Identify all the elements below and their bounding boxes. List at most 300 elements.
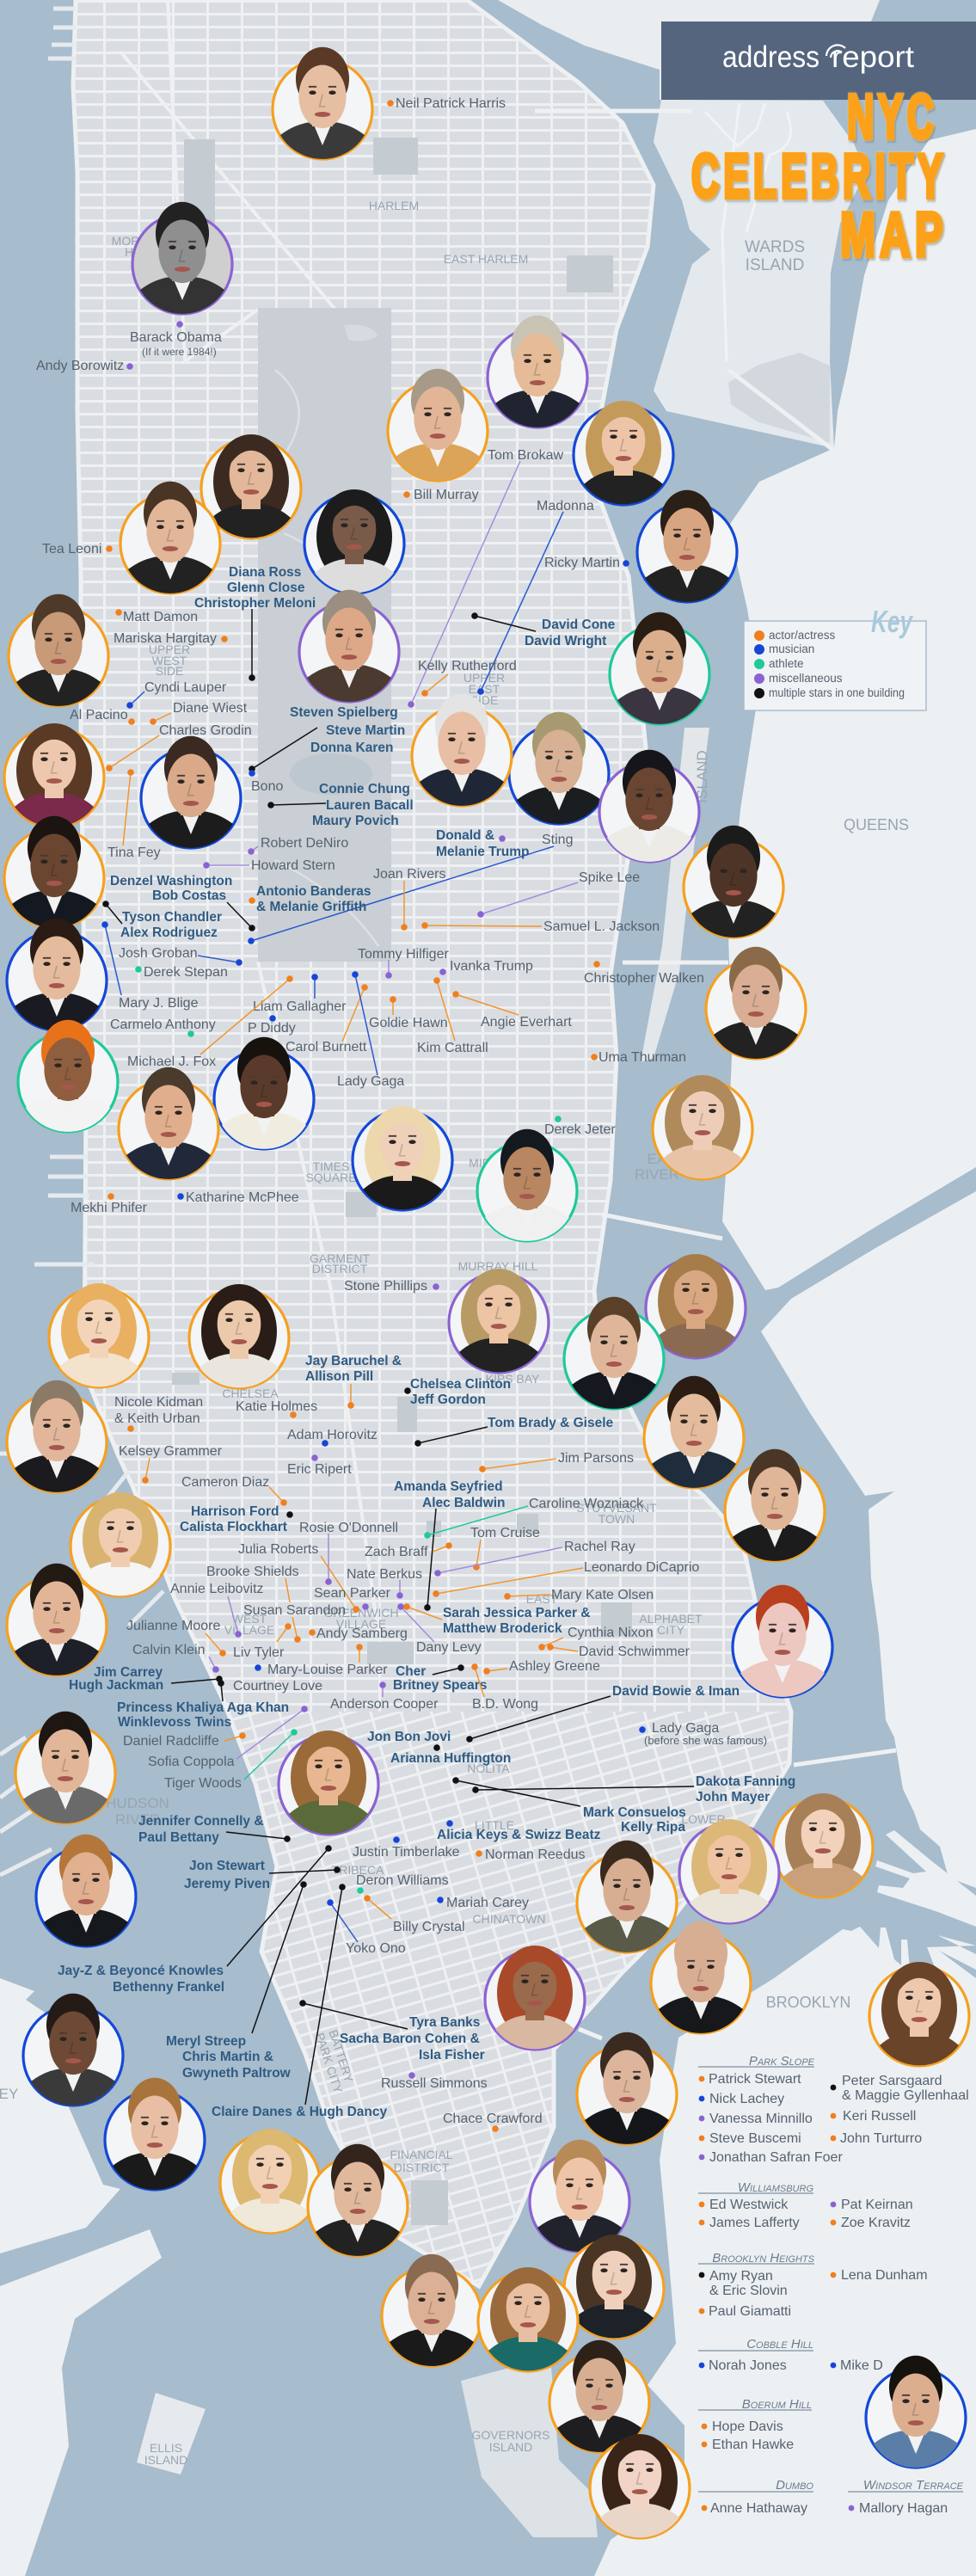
label: Cynthia Nixon [538,1626,654,1651]
label: Jennifer Connelly and Paul Bettany: Jennifer Connelly & [138,1814,264,1829]
Brooklyn panel: Park Slope: Patrick Stewart [709,2072,801,2087]
Brooklyn panel: Williamsburg: Pat Keirnan [841,2198,913,2212]
label: Tom Brady and Gisele [414,1416,614,1447]
neighbourhood labels: RIVER [115,1811,160,1828]
neighbourhood labels: LOWER [681,1812,726,1826]
neighbourhood labels: NOLITA [467,1761,510,1775]
neighbourhood labels: WEST [232,1612,267,1626]
portrait: Mariska Hargitay [201,434,301,538]
label: Charles Grodin: Charles Grodin [159,723,252,738]
label: David Cone, David Wright: David Cone [542,618,616,632]
label: Connie Chung, Lauren Bacall, Maury Povich: Maury Povich [312,814,399,828]
label: Arianna Huffington: Arianna Huffington [390,1751,511,1766]
map: Randalls Island park [728,353,830,443]
label: Jay-Z and Beyonce, Bethenny Frankel: Jay-Z & Beyoncé Knowles [58,1964,224,1978]
label: Samuel L. Jackson: Samuel L. Jackson [543,919,660,934]
label: Tom Cruise: Tom Cruise [470,1526,540,1540]
label: Julia Roberts [238,1542,359,1613]
neighbourhood labels: LITTLE [475,1818,514,1832]
label: Princess Khaliya Aga Khan, Winklevoss Twins [117,1700,289,1730]
label: Justin Timberlake: Justin Timberlake [353,1845,460,1860]
label: Ivanka Trump: Ivanka Trump [450,959,533,974]
label: Kelly Rutherford: Kelly Rutherford [418,659,517,673]
label: Jim Parsons: Jim Parsons [558,1451,634,1466]
Brooklyn panel: Windsor Terrace: Mallory Hagan [859,2501,948,2516]
portrait: Al Pacino [9,594,108,706]
label: Deron Williams: Deron Williams [356,1873,449,1888]
neighbourhood labels: EAST HARLEM [444,252,528,266]
neighbourhood labels: STUYVESANT [576,1501,657,1515]
neighbourhood labels: HUDSON [106,1795,169,1811]
portrait: Jonathan Safran Foer [530,2140,629,2252]
label: Donald and Melanie Trump: Melanie Trump [436,845,530,859]
map: Ellis Island [137,2393,206,2475]
neighbourhood labels: EA [648,1151,667,1167]
label: Jay Baruchel and Allison Pill: Allison Pill [305,1369,373,1384]
neighbourhood labels: CITY [657,1623,685,1637]
label: Billy Crystal: Billy Crystal [393,1920,465,1934]
map: Wards and Randalls Island [654,100,866,448]
label: Dakota Fanning, John Mayer: Dakota Fanning [696,1774,795,1789]
label: Susan Sarandon: Susan Sarandon [243,1603,346,1618]
Brooklyn panel: Brooklyn Heights: Amy Ryan [709,2269,773,2284]
label: Jim Carrey, Hugh Jackman: Jim Carrey [94,1665,163,1680]
Brooklyn panel: Dumbo: Dumbo [776,2478,813,2493]
label: Katie Holmes: Katie Holmes [236,1399,317,1414]
label: Barack Obama: (If it were 1984!) [142,346,217,358]
portrait: Chelsea Clinton [449,1269,549,1373]
map: Queens [722,129,976,1290]
label: Rosie O'Donnell: Rosie O'Donnell [299,1521,398,1535]
Brooklyn panel: Park Slope: Nick Lachey [709,2092,784,2106]
key panel: actor/actress [769,629,836,642]
portrait: Sting [509,712,609,824]
Brooklyn panel: Windsor Terrace [848,2478,964,2516]
map: Brooklyn south [594,1927,976,2576]
label: Barack Obama: Barack Obama [130,330,222,345]
label: Dakota Fanning, John Mayer: John Mayer [696,1790,770,1804]
portrait: Jon Bon Jovi [36,1835,136,1946]
label: Diane Wiest [150,701,248,725]
portrait: Derek Jeter [477,1129,577,1241]
Brooklyn panel: Windsor Terrace: Windsor Terrace [863,2478,964,2493]
label: Nicole Kidman and Keith Urban: Nicole Kidman [114,1395,203,1410]
label: Kelsey Grammer: Kelsey Grammer [119,1444,223,1459]
label: Dany Levy: Dany Levy [416,1640,482,1655]
neighbourhood labels: TIMES [313,1159,349,1173]
label: Calvin Klein: Calvin Klein [132,1643,205,1657]
label: Joan Rivers [373,867,445,931]
label: Donald and Melanie Trump [436,828,530,859]
label: Chelsea Clinton, Jeff Gordon: Chelsea Clinton [410,1377,511,1392]
label: Chelsea Clinton, Jeff Gordon [404,1377,511,1407]
label: Spike Lee [477,870,640,918]
portrait: Kelly Ripa [679,1819,779,1923]
label: Donald and Melanie Trump: Donald & [436,828,494,843]
label: Tyson Chandler, Alex Rodriguez: Tyson Chandler [122,910,222,925]
portrait: David Bowie [733,1585,832,1697]
neighbourhood labels: MOR [112,234,139,248]
label: Tom Cruise [470,1526,540,1571]
label: Liv Tyler: Liv Tyler [233,1645,285,1660]
Brooklyn panel: Williamsburg [698,2180,913,2230]
neighbourhood labels: ISLAND [144,2453,187,2467]
neighbourhood labels: TOWN [598,1512,635,1526]
neighbourhood labels: GARMENT [310,1251,370,1265]
label: Carol Burnett [285,984,368,1054]
neighbourhood labels: UPPER [149,642,190,656]
key panel: musician [769,642,814,655]
portrait: Arianna Huffington [279,1731,378,1835]
Brooklyn panel: Dumbo: Anne Hathaway [710,2501,807,2516]
label: Tiger Woods: Tiger Woods [164,1776,242,1791]
label: Tyra Banks, Sacha Baron Cohen and Isla Fisher: Sacha Baron Cohen & [340,2032,480,2046]
label: Dany Levy [397,1603,482,1655]
neighbourhood labels: VILLAGE [336,1617,386,1631]
portrait: Jay-Z [23,1994,123,2106]
label: Mary-Louise Parker: Mary-Louise Parker [267,1663,388,1677]
label: Alicia Keys and Swizz Beatz: Alicia Keys & Swizz Beatz [437,1828,601,1842]
neighbourhood labels: GOVERNORS [471,2428,550,2442]
label: Antonio Banderas and Melanie Griffith: Antonio Banderas [256,884,371,899]
portrait: Michael J. Fox [119,1067,218,1179]
label: B.D. Wong [471,1663,538,1712]
neighbourhood labels: TRIBECA [332,1863,384,1877]
portrait: Dakota Fanning [773,1793,873,1897]
label: Cyndi Lauper: Cyndi Lauper [144,680,227,695]
Brooklyn panel: Cobble Hill: Cobble Hill [746,2337,813,2352]
neighbourhood labels: SIDE [156,664,183,678]
label: Tommy Hilfiger: Tommy Hilfiger [358,947,449,962]
Brooklyn panel: Park Slope: Park Slope [749,2054,815,2069]
label: Bono: Bono [251,779,283,794]
portrait: Denzel Washington [4,816,104,928]
label: Derek Stepan: Derek Stepan [144,965,228,980]
label: Mariska Hargitay: Mariska Hargitay [114,631,217,646]
neighbourhood labels: PARK CITY [313,2031,346,2095]
label: Anderson Cooper [330,1681,439,1712]
portrait: Mike D [866,2356,966,2468]
portrait: Norman Reedus [577,1841,677,1952]
portrait: Jim Parsons [644,1376,744,1488]
neighbourhood labels: BATTERY [326,2028,356,2085]
neighbourhood labels: VILLAGE [224,1623,274,1637]
label: Eric Ripert: Eric Ripert [287,1462,352,1477]
Brooklyn panel: Park Slope: Jonathan Safran Foer [709,2150,843,2165]
Brooklyn panel: Brooklyn Heights: Paul Giamatti [709,2304,791,2319]
portrait: Spike Lee [599,750,699,862]
label: Brooke Shields [206,1565,299,1602]
label: Uma Thurman: Uma Thurman [598,1050,686,1065]
label: Kelsey Grammer [119,1444,223,1484]
Brooklyn panel: Cobble Hill: Mike D [840,2358,883,2373]
label: Russell Simmons: Russell Simmons [381,2076,488,2091]
label: Diana Ross, Glenn Close, Christopher Meloni: Glenn Close [227,581,305,595]
label: David Bowie and Iman: David Bowie & Iman [612,1684,740,1699]
label: Tyra Banks, Sacha Baron Cohen and Isla Fisher: Isla Fisher [419,2048,485,2063]
title: CELEBRITY [691,142,948,211]
key panel: multiple stars in one building [769,686,905,699]
label: Sarah Jessica Parker and Matthew Broderick: Matthew Broderick [443,1621,562,1636]
label: Cher, Britney Spears: Britney Spears [393,1678,487,1693]
label: Anderson Cooper: Anderson Cooper [330,1697,439,1712]
label: Tina Fey [107,769,161,860]
label: Christopher Walken [584,961,704,986]
portrait: Tom Brady [564,1297,664,1409]
label: Tyson Chandler, Alex Rodriguez: Alex Rodriguez [120,925,218,940]
label: Meryl Streep, Chris Martin and Gwyneth Paltrow: Gwyneth Paltrow [182,2066,292,2081]
label: Yoko Ono: Yoko Ono [346,1941,406,1956]
label: David Schwimmer: David Schwimmer [579,1645,691,1659]
label: Annie Leibovitz: Annie Leibovitz [170,1582,264,1596]
neighbourhood labels: EAST [469,682,500,696]
neighbourhood labels: UPPER [463,671,505,685]
label: Harrison Ford, Calista Flockhart: Harrison Ford [191,1504,279,1519]
label: Mary J. Blige: Mary J. Blige [119,996,199,1011]
neighbourhood labels: MURRAY HILL [458,1259,538,1273]
neighbourhood labels: CHINATOWN [472,1912,546,1926]
portrait: Diana Ross [304,489,404,593]
label: Connie Chung, Lauren Bacall, Maury Povich: Connie Chung [319,782,410,796]
Brooklyn panel: Williamsburg: Zoe Kravitz [841,2216,911,2230]
neighbourhood labels: ALPHABET [639,1612,703,1626]
neighbourhood labels: ISLAND [489,2440,532,2454]
label: Chace Crawford: Chace Crawford [443,2112,543,2126]
label: Jennifer Connelly and Paul Bettany: Paul Bettany [138,1830,219,1845]
label: Sean Parker: Sean Parker [314,1586,391,1601]
label: Josh Groban: Josh Groban [119,946,198,961]
map: shoreline highway [73,0,791,2286]
label: David Bowie and Iman [466,1684,740,1743]
label: Mariah Carey: Mariah Carey [446,1896,529,1910]
portrait: Gisele [646,1254,746,1358]
label: Calvin Klein [132,1643,219,1673]
Brooklyn panel: Williamsburg: Williamsburg [738,2180,813,2195]
label: Mark Consuelos, Kelly Ripa: Mark Consuelos [583,1805,686,1820]
label: Howard Stern [203,858,335,873]
label: Denzel Washington, Bob Costas [110,874,255,931]
map: piers [0,9,163,1875]
Brooklyn panel: Park Slope: Peter Sarsgaard [842,2074,942,2088]
portrait: Bill Murray [388,369,488,481]
portrait: Barack Obama [132,202,232,314]
label: Bill Murray: Bill Murray [414,488,479,502]
label: Sarah Jessica Parker and Matthew Broderick: Sarah Jessica Parker & [443,1606,590,1620]
label: Leonardo DiCaprio [433,1560,699,1597]
label: Princess Khaliya Aga Khan, Winklevoss Twins: Princess Khaliya Aga Khan [117,1700,289,1715]
label: Lady Gaga before she was famous [639,1721,767,1747]
label: Julianne Moore [126,1619,226,1657]
label: Jay Baruchel and Allison Pill: Jay Baruchel & [305,1354,402,1368]
portrait: Ricky Martin [637,490,737,602]
neighbourhood labels: GREENWICH [323,1606,399,1620]
label: Tiger Woods [164,1729,298,1791]
label: Julia Roberts: Julia Roberts [238,1542,318,1557]
label: Jon Stewart, Jeremy Piven [184,1859,341,1891]
label: Leonardo DiCaprio: Leonardo DiCaprio [584,1560,699,1575]
label: Adam Horovitz: Adam Horovitz [287,1428,378,1442]
neighbourhood labels: WEST [152,654,187,667]
Brooklyn panel: Brooklyn Heights: Lena Dunham [841,2268,928,2283]
label: Dakota Fanning, John Mayer [472,1774,795,1804]
label: Lady Gaga: Lady Gaga [337,1074,404,1089]
label: Sofia Coppola [148,1706,308,1769]
neighbourhood labels: QUEENS [844,816,909,833]
label: Alicia Keys and Swizz Beatz [437,1820,601,1842]
portrait: Chris Martin [105,2078,205,2190]
portrait: Steve Buscemi [577,2032,677,2144]
label: B.D. Wong: B.D. Wong [472,1697,538,1712]
neighbourhood labels: WARDS [745,238,805,256]
label: Harrison Ford, Calista Flockhart [180,1504,293,1534]
portrait: Keri Russell [869,1962,969,2066]
map: island roads [705,103,791,361]
neighbourhood labels: SIDE [470,693,498,707]
label: Tom Brokaw: Tom Brokaw [488,448,563,463]
label: Tom Brokaw [408,448,563,708]
label: Cher, Britney Spears [393,1664,487,1693]
label: Rachel Ray [434,1540,635,1577]
label: Stone Phillips: Stone Phillips [344,1279,427,1294]
label: Chelsea Clinton, Jeff Gordon: Jeff Gordon [410,1393,486,1407]
label: Ricky Martin: Ricky Martin [544,556,620,570]
label: David Cone, David Wright [471,612,616,649]
label: Amanda Seyfried, Alec Baldwin [394,1479,505,1611]
label: Josh Groban [119,946,242,966]
label: Antonio Banderas and Melanie Griffith [249,884,371,914]
label: Samuel L. Jackson [421,919,660,934]
title: NYC [847,82,938,151]
map: Governors Island [461,2357,598,2537]
portrait: Lena Dunham [564,2235,664,2339]
label: Diana Ross, Glenn Close, Christopher Meloni: Christopher Meloni [194,596,316,611]
label: Courtney Love: Courtney Love [233,1679,322,1694]
label: Ashley Greene: Ashley Greene [509,1659,600,1674]
label: Tea Leoni: Tea Leoni [42,542,101,556]
label: Matt Damon: Matt Damon [123,610,198,624]
label: Tina Fey: Tina Fey [107,845,161,860]
label: Angie Everhart [452,991,572,1030]
label: Rachel Ray: Rachel Ray [564,1540,635,1554]
label: Sting [248,833,573,944]
neighbourhood labels: CHELSEA [222,1386,279,1400]
label: Liv Tyler [233,1623,292,1660]
map: parks [172,138,632,2225]
label: Jim Carrey, Hugh Jackman: Hugh Jackman [69,1678,163,1693]
label: Madonna [477,499,594,695]
Brooklyn panel: Williamsburg: Ed Westwick [709,2198,789,2212]
label: Denzel Washington, Bob Costas: Denzel Washington [110,874,232,888]
portrait: Bono [141,736,241,848]
label: Nicole Kidman and Keith Urban: & Keith Urban [114,1411,200,1426]
label: Kim Cattrall: Kim Cattrall [417,1041,488,1055]
label: Claire Danes and Hugh Dancy [212,1884,388,2119]
label: Claire Danes and Hugh Dancy: Claire Danes & Hugh Dancy [212,2105,388,2119]
label: Jay-Z and Beyonce, Bethenny Frankel: Bethenny Frankel [113,1980,224,1995]
label: Steven Spielberg, Steve Martin, Donna Karen: Steve Martin [326,723,405,738]
label: Sting: Sting [542,833,573,847]
label: P Diddy: P Diddy [248,1021,296,1036]
Brooklyn panel: Brooklyn Heights [698,2251,928,2319]
label: Cher, Britney Spears: Cher [396,1664,426,1679]
label: Lady Gaga before she was famous: Lady Gaga [652,1721,719,1736]
Brooklyn panel: Williamsburg: James Lafferty [709,2216,800,2230]
map: New Jersey north [0,1978,120,2253]
portrait: Andy Samberg [15,1712,115,1823]
label: Barack Obama [130,321,222,358]
portrait: Tyra Banks [485,1946,585,2050]
Brooklyn panel: Dumbo [698,2478,813,2516]
label: Eric Ripert [287,1454,352,1477]
label: Zach Braff: Zach Braff [365,1545,428,1559]
label: Spike Lee: Spike Lee [579,870,640,885]
label: Meryl Streep, Chris Martin and Gwyneth Paltrow: Chris Martin & [182,2050,273,2064]
label: Amanda Seyfried, Alec Baldwin: Alec Baldwin [422,1496,505,1510]
label: Joan Rivers: Joan Rivers [373,867,445,882]
Brooklyn panel: Brooklyn Heights: & Eric Slovin [709,2284,788,2298]
label: Tyson Chandler, Alex Rodriguez [102,901,222,940]
Brooklyn panel: Park Slope: Vanessa Minnillo [709,2112,813,2126]
portrait: Leonardo DiCaprio [725,1449,825,1561]
label: Meryl Streep, Chris Martin and Gwyneth Paltrow [166,1881,307,2081]
portrait: Christopher Walken [706,947,806,1059]
label: Denzel Washington, Bob Costas: Bob Costas [152,888,226,903]
neighbourhood labels: KIPS BAY [486,1372,540,1386]
neighbourhood labels: BROOKLYN [766,1994,850,2011]
portrait: Ethan Hawke [549,2340,649,2452]
label: Mekhi Phifer [71,1193,148,1215]
portrait: Nicole Kidman [49,1283,149,1387]
label: Steven Spielberg, Steve Martin, Donna Karen: Steven Spielberg [290,705,398,720]
label: Nicole Kidman and Keith Urban [114,1395,203,1432]
portrait: Lady Gaga [353,1106,452,1210]
label: Susan Sarandon [243,1603,346,1643]
Brooklyn panel: Park Slope: John Turturro [840,2131,922,2146]
label: Meryl Streep, Chris Martin and Gwyneth Paltrow: Meryl Streep [166,2034,246,2049]
map: Bronx land [498,0,880,100]
neighbourhood labels: MID [469,1156,491,1170]
label: Liam Gallagher [253,974,347,1014]
label: Bono [249,770,283,794]
label: Mark Consuelos, Kelly Ripa: Kelly Ripa [621,1820,685,1835]
Brooklyn panel: Cobble Hill [698,2337,883,2373]
label: Lady Gaga before she was famous: (before she was famous) [644,1734,767,1747]
label: Norman Reedus: Norman Reedus [485,1847,585,1862]
portrait: Neil Patrick Harris [273,47,372,159]
key panel: Key [871,604,913,639]
label: Jay Baruchel and Allison Pill [305,1354,402,1409]
label: Jim Carrey, Hugh Jackman [69,1665,224,1701]
label: Katharine McPhee: Katharine McPhee [186,1190,299,1205]
label: Howard Stern: Howard Stern [251,858,335,873]
neighbourhood labels: ISLAND [694,750,710,803]
portrait: Matt Damon [120,482,220,593]
title: MAP [840,200,948,270]
header banner: report [832,40,914,74]
portrait: Claire Danes [220,2129,320,2233]
label: Annie Leibovitz [170,1582,264,1638]
Brooklyn panel: Park Slope: Steve Buscemi [709,2131,801,2146]
label: Mary Kate Olsen: Mary Kate Olsen [551,1588,654,1602]
label: Harrison Ford, Calista Flockhart: Calista Flockhart [180,1520,287,1534]
label: Mary J. Blige [101,921,199,1011]
portrait: Uma Thurman [653,1075,752,1179]
label: Neil Patrick Harris: Neil Patrick Harris [396,96,506,111]
label: Tommy Hilfiger [358,947,449,979]
label: Tyra Banks, Sacha Baron Cohen and Isla Fisher [299,2000,485,2063]
portrait: Cameron Diaz [71,1492,170,1596]
label: Jon Bon Jovi [367,1730,451,1751]
